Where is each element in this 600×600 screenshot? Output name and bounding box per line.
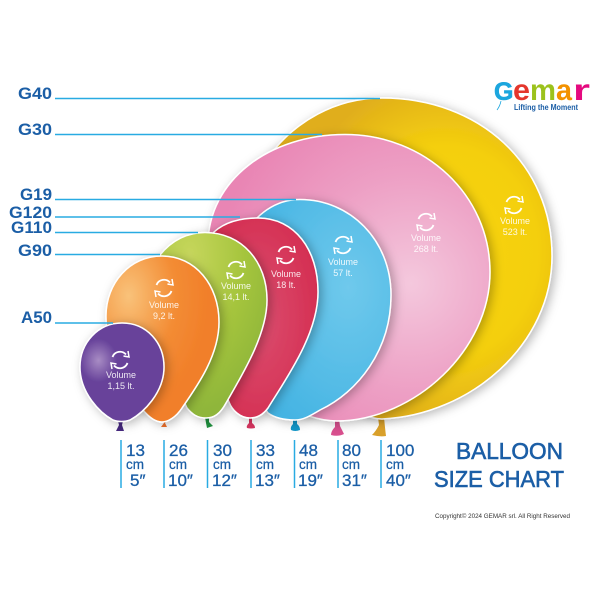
size labels: G120 (9, 203, 52, 222)
size labels: A50 (21, 308, 52, 327)
size columns: cm (386, 457, 404, 472)
size columns: cm (342, 457, 360, 472)
copyright: Copyright© 2024 GEMAR srl. All Right Reserved (435, 512, 570, 520)
volume: blue: Volume (328, 257, 358, 267)
volume: red: 18 lt. (276, 280, 296, 290)
volume: yellow: Volume (500, 216, 530, 226)
size labels: G110 (11, 218, 52, 237)
volume: purple: 1,15 lt. (107, 381, 135, 391)
size columns: 48 (299, 441, 318, 460)
volume: orange: Volume (149, 300, 179, 310)
volume: green (221, 261, 251, 302)
logo: m (530, 74, 556, 107)
size columns: 13 (126, 441, 145, 460)
size columns: 5″ (130, 471, 145, 490)
title: SIZE CHART (434, 466, 564, 492)
volume: orange: 9,2 lt. (153, 311, 175, 321)
volume: yellow (500, 196, 530, 237)
volume: blue (328, 236, 358, 278)
size columns: cm (256, 457, 274, 472)
balloon: A50 orange (106, 256, 219, 427)
size columns: 19″ (298, 471, 323, 490)
volume: red (271, 246, 301, 290)
size columns: 80 (342, 441, 361, 460)
size columns: cm (213, 457, 231, 472)
size columns: cm (169, 457, 187, 472)
size columns: 10″ (168, 471, 193, 490)
logo: r (573, 74, 590, 107)
logo: G (494, 78, 513, 106)
size columns: cm (299, 457, 317, 472)
logo: e (513, 74, 530, 107)
volume: green: Volume (221, 281, 251, 291)
volume: pink: 268 lt. (414, 244, 438, 254)
size labels: G40 (18, 84, 52, 103)
size columns: 12″ (212, 471, 237, 490)
size columns: 13″ (255, 471, 280, 490)
logo: Lifting the Moment (514, 103, 578, 112)
size labels: G30 (18, 120, 52, 139)
size columns (121, 440, 414, 490)
logo: a (556, 74, 572, 107)
volume: pink: Volume (411, 233, 441, 243)
size columns: cm (126, 457, 144, 472)
size columns: 100 (386, 441, 414, 460)
balloon: G19 blue (238, 200, 391, 431)
size columns: 33 (256, 441, 275, 460)
size columns: 26 (169, 441, 188, 460)
size columns: 30 (213, 441, 232, 460)
size labels: G90 (18, 241, 52, 260)
volume: purple (106, 351, 136, 391)
volume: green: 14,1 lt. (222, 292, 250, 302)
title (434, 438, 564, 492)
volume: blue: 57 lt. (333, 268, 353, 278)
volume: yellow: 523 lt. (503, 227, 527, 237)
volume: pink (411, 213, 441, 254)
size labels: G19 (20, 185, 52, 204)
volume: orange (149, 279, 179, 321)
balloon: G40 yellow (270, 98, 552, 436)
logo (494, 74, 590, 112)
size labels (9, 84, 52, 327)
pointer lines (55, 98, 380, 323)
balloon: 5 inch purple (80, 323, 164, 431)
balloon: G110 green (157, 232, 267, 428)
volume: purple: Volume (106, 370, 136, 380)
size columns: 31″ (342, 471, 367, 490)
size columns: 40″ (386, 471, 411, 490)
balloon: G120 red (208, 218, 318, 428)
volume: red: Volume (271, 269, 301, 279)
title: BALLOON (456, 438, 563, 464)
balloon: G30 pink (208, 134, 490, 436)
